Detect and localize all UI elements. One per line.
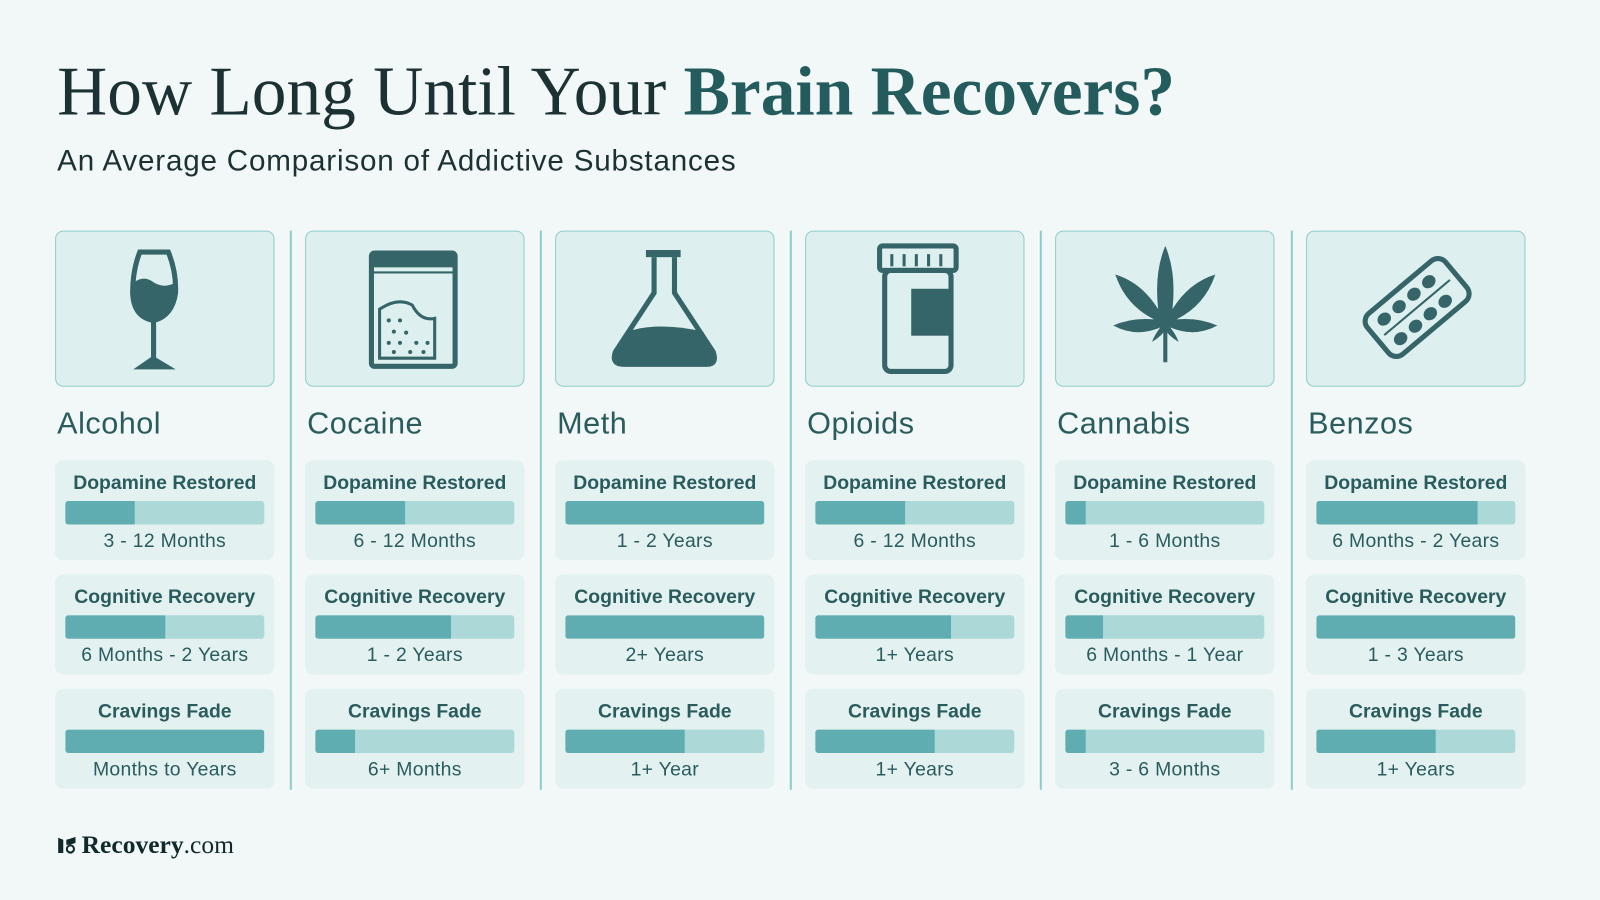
icon: flask bbox=[555, 231, 774, 387]
card cravings: Months to Years bbox=[93, 759, 237, 781]
card cravings: Cravings Fade bbox=[598, 701, 732, 722]
card cognitive: Cognitive Recovery bbox=[74, 587, 255, 608]
panel: benzos bbox=[1306, 230, 1526, 788]
card cognitive: Cognitive Recovery bbox=[324, 587, 505, 608]
card dopamine: 1 - 6 Months bbox=[1109, 531, 1221, 552]
card cognitive: Cognitive Recovery bbox=[824, 587, 1005, 608]
subtitle: An Average Comparison of Addictive Substances bbox=[57, 145, 737, 178]
card dopamine: Dopamine Restored bbox=[573, 472, 756, 494]
card cravings bbox=[555, 689, 774, 789]
card cognitive bbox=[555, 574, 774, 674]
card dopamine: 1 - 2 Years bbox=[617, 531, 713, 552]
card cravings: Cravings Fade bbox=[848, 701, 982, 722]
panel: cannabis bbox=[1055, 230, 1274, 788]
card cognitive bbox=[805, 574, 1024, 674]
card cravings bbox=[805, 689, 1024, 789]
panel: opioids bbox=[805, 230, 1024, 788]
card dopamine: Dopamine Restored bbox=[1324, 472, 1507, 494]
icon: leaf bbox=[1055, 231, 1274, 387]
panel: meth bbox=[555, 230, 774, 788]
name: Cocaine bbox=[307, 407, 423, 441]
card dopamine: Dopamine Restored bbox=[323, 472, 506, 494]
card dopamine bbox=[555, 460, 774, 560]
card cognitive: Cognitive Recovery bbox=[574, 587, 755, 608]
card dopamine: 6 Months - 2 Years bbox=[1332, 531, 1499, 552]
card cravings: 1+ Years bbox=[1377, 759, 1455, 781]
card cognitive bbox=[305, 574, 524, 674]
card cravings bbox=[1306, 689, 1526, 789]
card cognitive bbox=[55, 574, 274, 674]
card cravings: 3 - 6 Months bbox=[1109, 759, 1221, 781]
card cravings: 6+ Months bbox=[368, 759, 462, 781]
card dopamine bbox=[1306, 460, 1526, 560]
card cravings bbox=[55, 689, 274, 789]
card dopamine bbox=[305, 460, 524, 560]
panel: alcohol bbox=[55, 230, 274, 788]
card cognitive: Cognitive Recovery bbox=[1074, 587, 1255, 608]
card cravings: Cravings Fade bbox=[348, 701, 482, 722]
title: How Long Until Your Brain Recovers? bbox=[57, 52, 1175, 130]
name: Meth bbox=[557, 407, 627, 441]
card dopamine: 3 - 12 Months bbox=[104, 531, 226, 552]
card dopamine bbox=[805, 460, 1024, 560]
card cravings: Cravings Fade bbox=[98, 701, 232, 722]
card cravings: Cravings Fade bbox=[1349, 701, 1483, 722]
card cravings bbox=[305, 689, 524, 789]
name: Benzos bbox=[1308, 407, 1413, 441]
card cognitive bbox=[1306, 574, 1526, 674]
icon: bag bbox=[305, 231, 524, 387]
card cravings bbox=[1055, 689, 1274, 789]
card dopamine: 6 - 12 Months bbox=[354, 531, 476, 552]
card dopamine: Dopamine Restored bbox=[1073, 472, 1256, 494]
card cravings: Cravings Fade bbox=[1098, 701, 1232, 722]
icon: pill bottle bbox=[805, 231, 1024, 387]
logo: Recovery.com bbox=[82, 832, 234, 859]
card dopamine bbox=[55, 460, 274, 560]
card cognitive bbox=[1055, 574, 1274, 674]
card cognitive: 6 Months - 1 Year bbox=[1086, 645, 1243, 666]
card cognitive: 6 Months - 2 Years bbox=[81, 645, 248, 666]
card dopamine: Dopamine Restored bbox=[73, 472, 256, 494]
card cognitive: 1+ Years bbox=[876, 645, 954, 666]
name: Opioids bbox=[807, 407, 915, 441]
card cognitive: 2+ Years bbox=[626, 645, 704, 666]
card dopamine: Dopamine Restored bbox=[823, 472, 1006, 494]
card dopamine: 6 - 12 Months bbox=[854, 531, 976, 552]
card cravings: 1+ Year bbox=[631, 759, 699, 781]
name: Alcohol bbox=[57, 407, 161, 441]
card cognitive: Cognitive Recovery bbox=[1325, 587, 1506, 608]
name: Cannabis bbox=[1057, 407, 1191, 441]
card cognitive: 1 - 2 Years bbox=[367, 645, 463, 666]
icon: wine glass bbox=[55, 231, 274, 387]
icon: blister pack bbox=[1306, 231, 1526, 387]
panel: cocaine bbox=[305, 230, 524, 788]
card dopamine bbox=[1055, 460, 1274, 560]
card cognitive: 1 - 3 Years bbox=[1368, 645, 1464, 666]
card cravings: 1+ Years bbox=[876, 759, 954, 781]
